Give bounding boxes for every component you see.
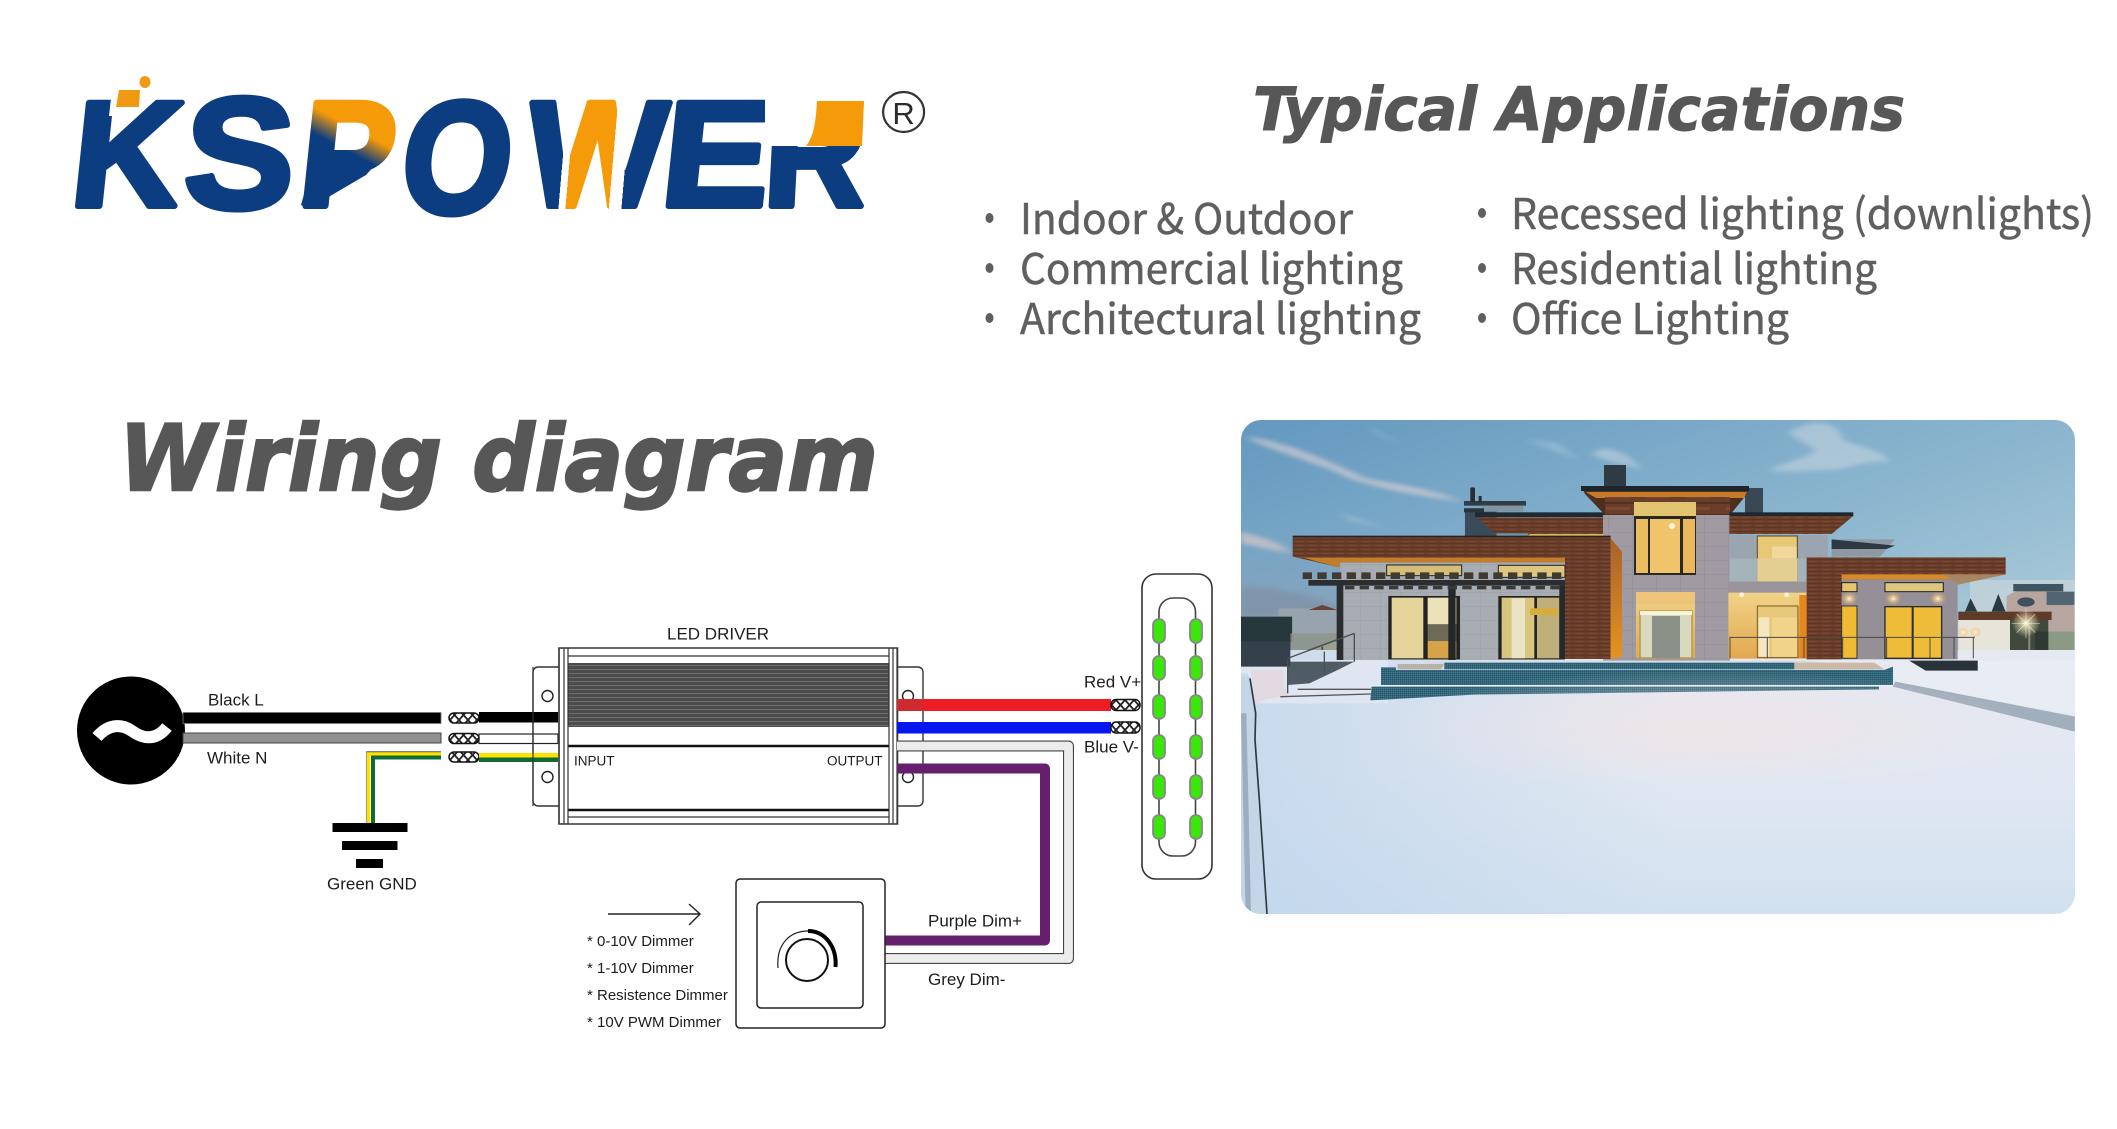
AC source icon	[77, 676, 185, 784]
logo letter O: O	[393, 68, 522, 247]
applications list left: Indoor & Outdoor	[1020, 186, 1354, 247]
logo orange square	[116, 90, 140, 107]
purple dim wire	[885, 768, 1045, 940]
house: tower wall	[1603, 515, 1730, 661]
heading: Typical Applications: Typical Applications	[1253, 75, 1905, 145]
house: upper roof and chimneys	[1464, 487, 1605, 538]
applications list left: Commercial lighting	[1020, 236, 1403, 297]
house: right of tower upper	[1728, 512, 1895, 659]
mounting flange left	[533, 667, 563, 806]
ground symbol	[332, 823, 408, 868]
logo letter R: R	[760, 70, 871, 238]
LED strip	[1142, 574, 1212, 879]
label Red V+: Red V+	[1084, 672, 1141, 692]
dimmer types list: * 10V PWM Dimmer	[587, 1014, 721, 1031]
mains wires	[183, 712, 441, 823]
logo letter K: K	[65, 70, 190, 238]
logo R mask and orange block	[765, 95, 869, 146]
snow banks	[1241, 633, 2075, 914]
applications list right	[1478, 181, 2094, 347]
label LED DRIVER: LED DRIVER	[667, 624, 769, 644]
label INPUT: INPUT	[574, 754, 614, 768]
logo letter S: S	[180, 65, 299, 242]
input wires into driver	[479, 667, 558, 806]
label Green GND: Green GND	[327, 874, 417, 894]
house: tower entrance	[1636, 592, 1695, 658]
dimmer	[736, 879, 885, 1028]
applications list right: Office Lighting	[1511, 286, 1789, 347]
label Blue V-: Blue V-	[1084, 738, 1139, 756]
mounting flange right	[893, 667, 923, 806]
output connectors	[1111, 700, 1140, 733]
logo map pin point	[301, 145, 389, 209]
label Purple Dim+: Purple Dim+	[928, 912, 1022, 930]
applications list left	[986, 186, 1421, 347]
grey dim wire	[885, 746, 1068, 958]
pool steps	[1370, 661, 1893, 700]
label Black L: Black L	[208, 690, 264, 710]
clouds	[1240, 423, 1890, 617]
house: tower chimney and cap	[1581, 465, 1763, 518]
dimmer types list	[587, 933, 728, 1031]
logo: KSPOWER	[65, 65, 924, 247]
snow warm glow	[1446, 674, 1888, 748]
photo: modern house in snow at dusk	[1240, 420, 2075, 914]
house: tower upper window	[1634, 502, 1696, 575]
blue output wire	[897, 722, 1111, 734]
applications list left: Architectural lighting	[1020, 286, 1421, 347]
dimmer types list: * Resistence Dimmer	[587, 987, 728, 1004]
applications list right: Recessed lighting (downlights)	[1511, 181, 2094, 242]
logo letter E: E	[655, 70, 780, 238]
sky	[1241, 420, 2075, 650]
registered mark: R	[892, 96, 915, 131]
logo letter P: P	[293, 70, 404, 238]
house: left wing	[1293, 536, 1622, 660]
stairs and left pavement	[1241, 633, 1388, 914]
label OUTPUT: OUTPUT	[827, 754, 882, 768]
registered mark	[883, 92, 924, 132]
house: right wing	[1729, 557, 2006, 659]
red output wire	[897, 699, 1111, 711]
background left buildings and trees	[1241, 605, 1337, 650]
background right buildings	[1958, 584, 2074, 650]
dimmer types list: * 0-10V Dimmer	[587, 933, 694, 950]
dimmer types list: * 1-10V Dimmer	[587, 960, 694, 977]
applications list right: Residential lighting	[1511, 236, 1877, 297]
logo letter W: W	[520, 70, 673, 238]
snow right bank	[1893, 660, 2075, 732]
LED driver box	[559, 648, 898, 824]
logo K notch	[109, 98, 132, 116]
logo orange dot	[140, 76, 150, 88]
label Grey Dim-: Grey Dim-	[928, 970, 1005, 989]
wiring diagram	[77, 574, 1212, 1031]
input connectors	[449, 713, 479, 762]
heading: Wiring diagram: Wiring diagram	[119, 407, 878, 512]
label White N: White N	[207, 748, 267, 768]
snow ground	[1241, 650, 2075, 914]
arrow to dimmer	[608, 904, 700, 925]
